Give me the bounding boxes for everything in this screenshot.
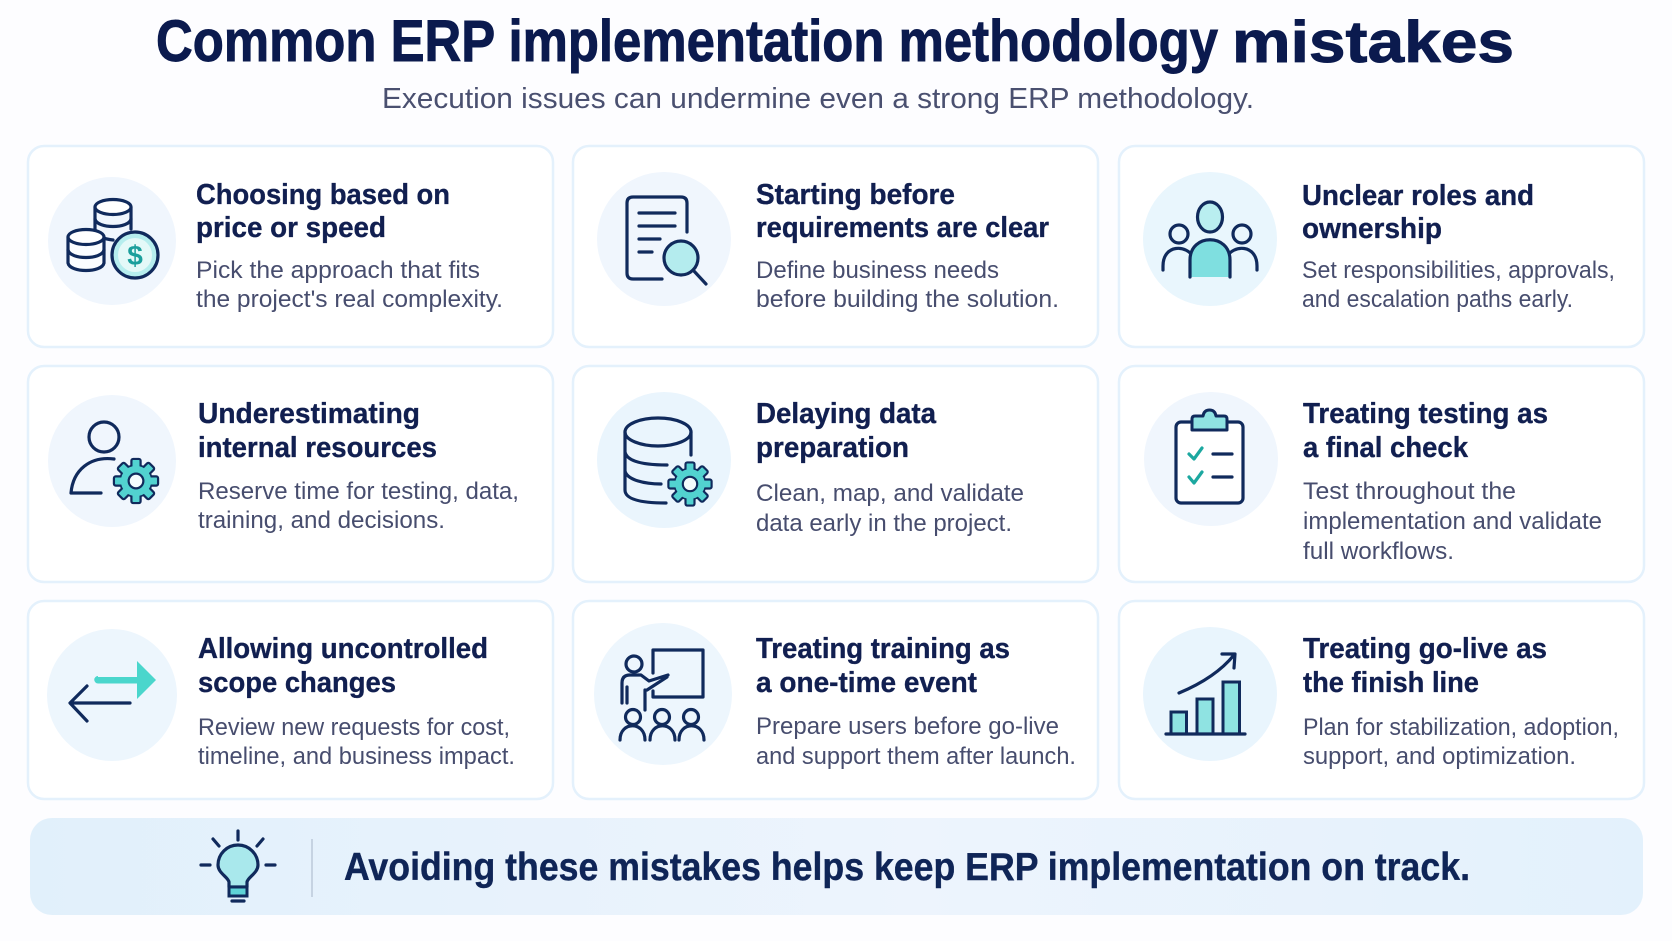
heading: a final check <box>1303 432 1469 464</box>
text block <box>756 480 1024 537</box>
icon: rising bar chart <box>1143 627 1277 761</box>
heading <box>196 179 450 244</box>
icon: coins with dollar <box>48 177 176 305</box>
heading <box>198 398 437 464</box>
panel: treating training as a one-time event <box>573 601 1098 799</box>
heading <box>756 633 1010 699</box>
text block <box>198 478 519 534</box>
heading <box>756 179 1049 244</box>
text block: Plan for stabilization, adoption, <box>1303 714 1619 741</box>
panel: delaying data preparation <box>573 366 1098 582</box>
heading: Treating testing as <box>1303 398 1548 430</box>
icon: two-way arrows <box>47 629 177 761</box>
heading: internal resources <box>198 432 437 464</box>
panel: treating go-live as the finish line <box>1119 601 1644 799</box>
panel: treating testing as a final check <box>1119 366 1644 582</box>
heading: a one-time event <box>756 667 977 699</box>
heading: Choosing based on <box>196 179 450 211</box>
heading: requirements are clear <box>756 212 1049 244</box>
heading: Treating go-live as <box>1303 633 1547 665</box>
heading: scope changes <box>198 667 396 699</box>
heading: Starting before <box>756 179 955 211</box>
heading: preparation <box>756 432 909 464</box>
panel: starting before requirements are clear <box>573 146 1098 347</box>
icon: database with gear <box>597 392 731 528</box>
title: mistakes <box>1232 10 1514 75</box>
text block: Prepare users before go-live <box>756 713 1059 740</box>
heading: Treating training as <box>756 633 1010 665</box>
text block: support, and optimization. <box>1303 743 1576 770</box>
heading: Allowing uncontrolled <box>198 633 488 665</box>
heading <box>1302 180 1534 245</box>
heading <box>198 633 488 699</box>
text block: Pick the approach that fits <box>196 257 480 284</box>
text block: Set responsibilities, approvals, <box>1302 257 1615 284</box>
heading: price or speed <box>196 212 386 244</box>
panel: choosing based on price or speed <box>28 146 553 347</box>
icon: coins with dollar: $ <box>127 240 143 271</box>
icon: three people <box>1143 172 1277 306</box>
panel: allowing uncontrolled scope changes <box>28 601 553 799</box>
text block: Clean, map, and validate <box>756 480 1024 507</box>
text block: and escalation paths early. <box>1302 286 1573 313</box>
icon: trainer and audience <box>594 623 732 765</box>
text block <box>198 714 515 770</box>
callout banner <box>30 818 1643 915</box>
text block <box>1303 478 1602 565</box>
heading <box>756 398 937 464</box>
heading <box>1303 398 1548 464</box>
text block: before building the solution. <box>756 286 1059 313</box>
text block: training, and decisions. <box>198 507 445 534</box>
text block <box>1303 714 1619 770</box>
text block: timeline, and business impact. <box>198 743 515 770</box>
text block: Test throughout the <box>1303 478 1516 505</box>
heading <box>1303 633 1547 699</box>
text block: full workflows. <box>1303 538 1454 565</box>
panel: unclear roles and ownership <box>1119 146 1644 347</box>
text block <box>196 257 503 313</box>
heading: the finish line <box>1303 667 1479 699</box>
heading: Underestimating <box>198 398 420 430</box>
subtitle: Execution issues can undermine even a strong ERP methodology. <box>382 83 1254 115</box>
divider <box>311 839 313 897</box>
icon: document with magnifier <box>597 172 731 306</box>
text block <box>756 713 1076 770</box>
icon: light bulb <box>201 831 275 901</box>
text block <box>756 257 1059 313</box>
text block: Reserve time for testing, data, <box>198 478 519 505</box>
heading: ownership <box>1302 213 1442 245</box>
text block: the project's real complexity. <box>196 286 503 313</box>
heading: Unclear roles and <box>1302 180 1534 212</box>
text block: Define business needs <box>756 257 999 284</box>
panel: underestimating internal resources <box>28 366 553 582</box>
icon: person with gear <box>48 395 176 527</box>
text block: Review new requests for cost, <box>198 714 510 741</box>
heading: Delaying data <box>756 398 937 430</box>
text block: implementation and validate <box>1303 508 1602 535</box>
text block <box>1302 257 1615 313</box>
text block: and support them after launch. <box>756 743 1076 770</box>
title: Common ERP implementation methodology <box>156 9 1218 74</box>
icon: clipboard checklist <box>1144 392 1278 526</box>
banner text: Avoiding these mistakes helps keep ERP implementation on track. <box>344 846 1470 889</box>
text block: data early in the project. <box>756 510 1012 537</box>
